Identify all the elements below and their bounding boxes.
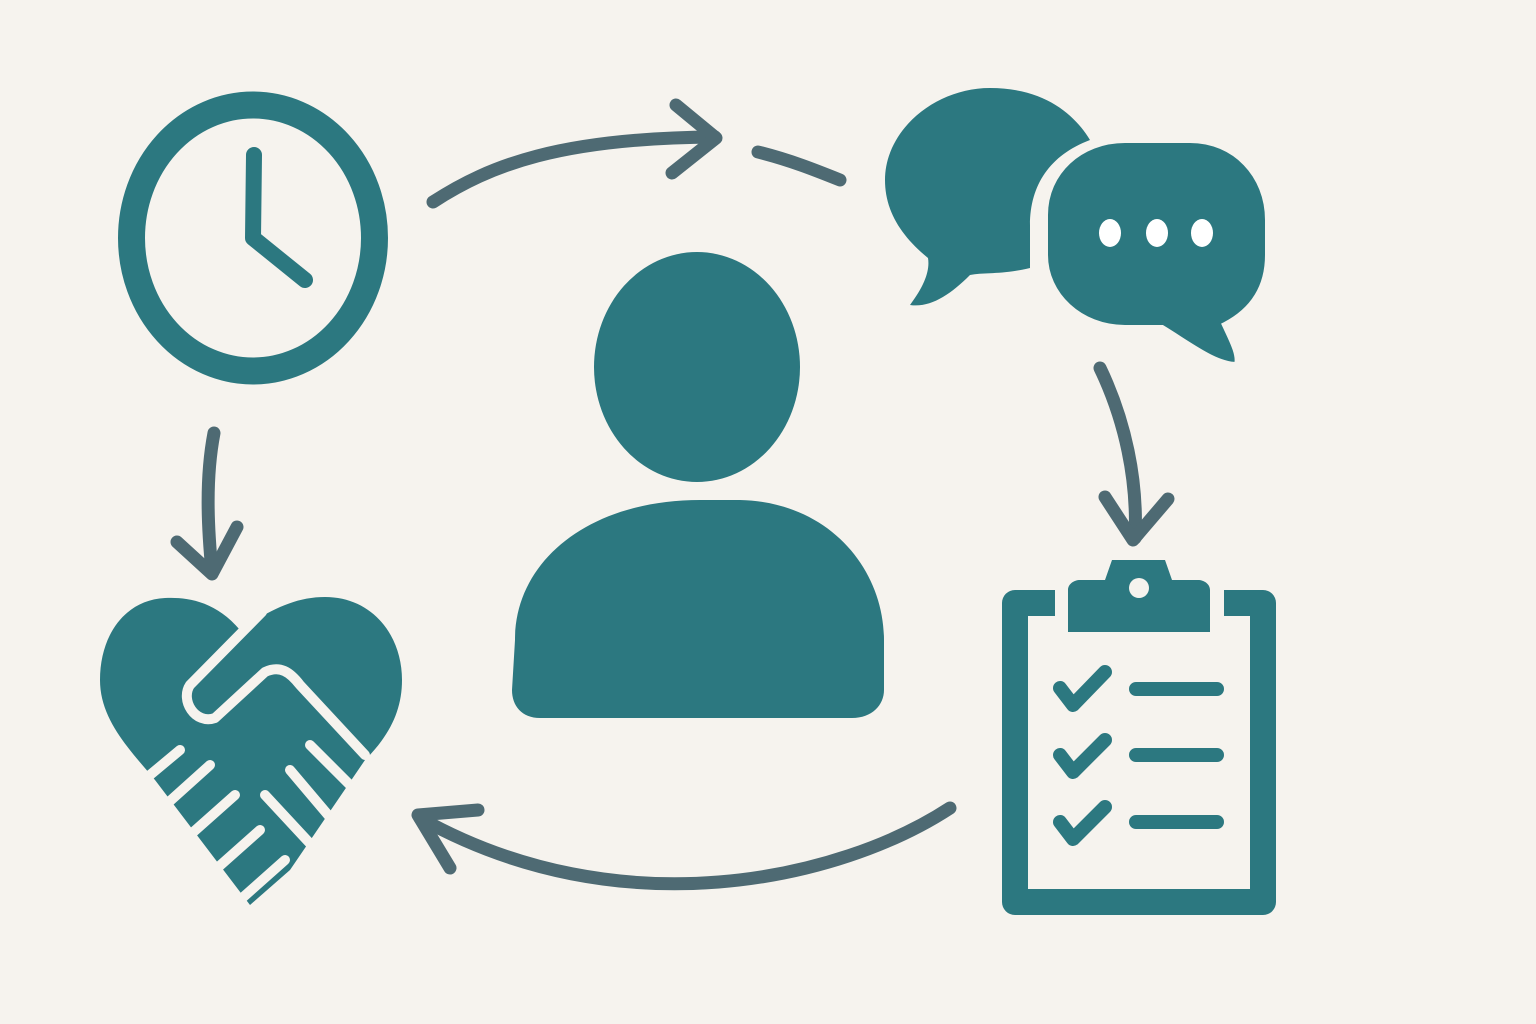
arrow: clipboard to heart [418,808,950,884]
icon: clock [132,105,374,371]
arrow: chat to clipboard [1100,368,1168,540]
arrow: clock to chat [433,105,840,202]
icon: person [512,252,884,718]
icon: heart with handshake [100,597,402,905]
arrow: clock to heart [177,433,237,574]
icon: clipboard [1015,560,1263,902]
icon: speech bubbles [885,88,1268,365]
